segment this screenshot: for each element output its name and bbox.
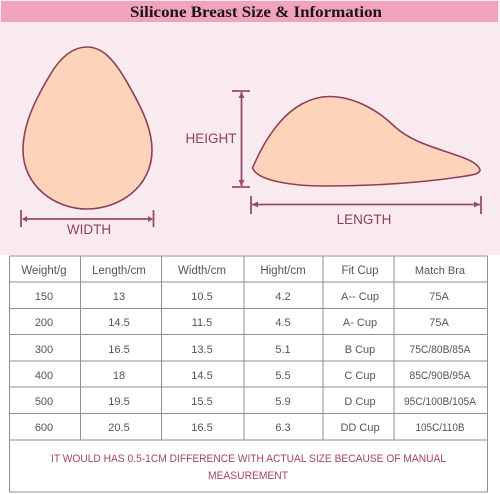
table row: 200 g: 4.5 <box>275 317 291 329</box>
table row: 400 g: 400 <box>35 370 53 382</box>
size table <box>10 256 488 492</box>
table row: 500 g: 19.5 <box>108 396 130 408</box>
table row: 500 g: 500 <box>35 396 53 408</box>
table row: 150 g: 13 <box>113 291 125 303</box>
table row: 500 g: 15.5 <box>191 396 213 408</box>
table row: 400 g: C Cup <box>344 370 376 382</box>
table row: 150 g: A-- Cup <box>341 291 379 303</box>
table row: 400 g <box>35 370 471 382</box>
table row: 600 g: 16.5 <box>191 422 213 434</box>
table row: 200 g: 14.5 <box>108 317 130 329</box>
label: width: WIDTH <box>67 222 111 237</box>
table row: 600 g: DD Cup <box>340 422 380 434</box>
table row: 400 g: 14.5 <box>191 370 213 382</box>
arrow: width dimension <box>21 210 154 227</box>
table grid <box>10 256 488 492</box>
table row: 200 g: 75A <box>429 317 449 329</box>
table row: 300 g: 13.5 <box>191 344 213 356</box>
table row: 400 g: 5.5 <box>275 370 291 382</box>
label: height: HEIGHT <box>185 131 237 146</box>
table header row: Match Bra <box>415 265 466 277</box>
diagram: side view height and length <box>185 91 481 227</box>
icon: side profile shape <box>252 96 480 186</box>
table footnote: IT WOULD HAS 0.5-1CM DIFFERENCE WITH ACTUAL SIZE BECAUSE OF MANUAL <box>51 453 446 465</box>
table row: 600 g: 20.5 <box>108 422 130 434</box>
title banner: Silicone Breast Size & Information <box>130 4 382 21</box>
table footnote <box>51 453 446 482</box>
table header row: Hight/cm <box>260 265 306 277</box>
table header row: Length/cm <box>92 265 146 277</box>
table row: 300 g: 5.1 <box>275 344 291 356</box>
table row: 150 g: 150 <box>35 291 53 303</box>
table row: 150 g: 4.2 <box>275 291 291 303</box>
panel: product diagrams background <box>0 0 500 255</box>
icon: teardrop front shape <box>23 47 152 209</box>
table row: 200 g: 11.5 <box>192 317 212 329</box>
diagram: front view width <box>21 47 154 237</box>
title banner <box>1 1 498 22</box>
table row: 200 g: A- Cup <box>343 317 377 329</box>
table row: 150 g: 75A <box>429 291 449 303</box>
arrow: length dimension <box>251 196 481 214</box>
table row: 500 g: 95C/100B/105A <box>404 396 477 408</box>
table row: 600 g <box>35 422 464 434</box>
table row: 300 g: B Cup <box>345 344 375 356</box>
table footnote: MEASUREMENT <box>208 470 288 482</box>
table row: 300 g: 16.5 <box>108 344 130 356</box>
table row: 500 g: 5.9 <box>275 396 291 408</box>
table row: 600 g: 105C/110B <box>416 422 464 434</box>
table row: 150 g <box>35 291 449 303</box>
arrow: height dimension <box>232 91 250 187</box>
table header row <box>21 265 466 277</box>
table row: 200 g <box>35 317 449 329</box>
table row: 300 g <box>35 344 471 356</box>
table row: 600 g: 6.3 <box>275 422 291 434</box>
table row: 400 g: 18 <box>113 370 125 382</box>
table row: 300 g: 75C/80B/85A <box>410 344 471 356</box>
table header row: Width/cm <box>178 265 226 277</box>
table header row: Fit Cup <box>341 265 379 277</box>
table row: 300 g: 300 <box>35 344 53 356</box>
table row: 600 g: 600 <box>35 422 53 434</box>
table row: 200 g: 200 <box>35 317 53 329</box>
table row: 500 g <box>35 396 477 408</box>
table row: 400 g: 85C/90B/95A <box>410 370 471 382</box>
table header row: Weight/g <box>21 265 67 277</box>
table row: 150 g: 10.5 <box>191 291 213 303</box>
label: length: LENGTH <box>337 212 391 227</box>
table row: 500 g: D Cup <box>344 396 376 408</box>
